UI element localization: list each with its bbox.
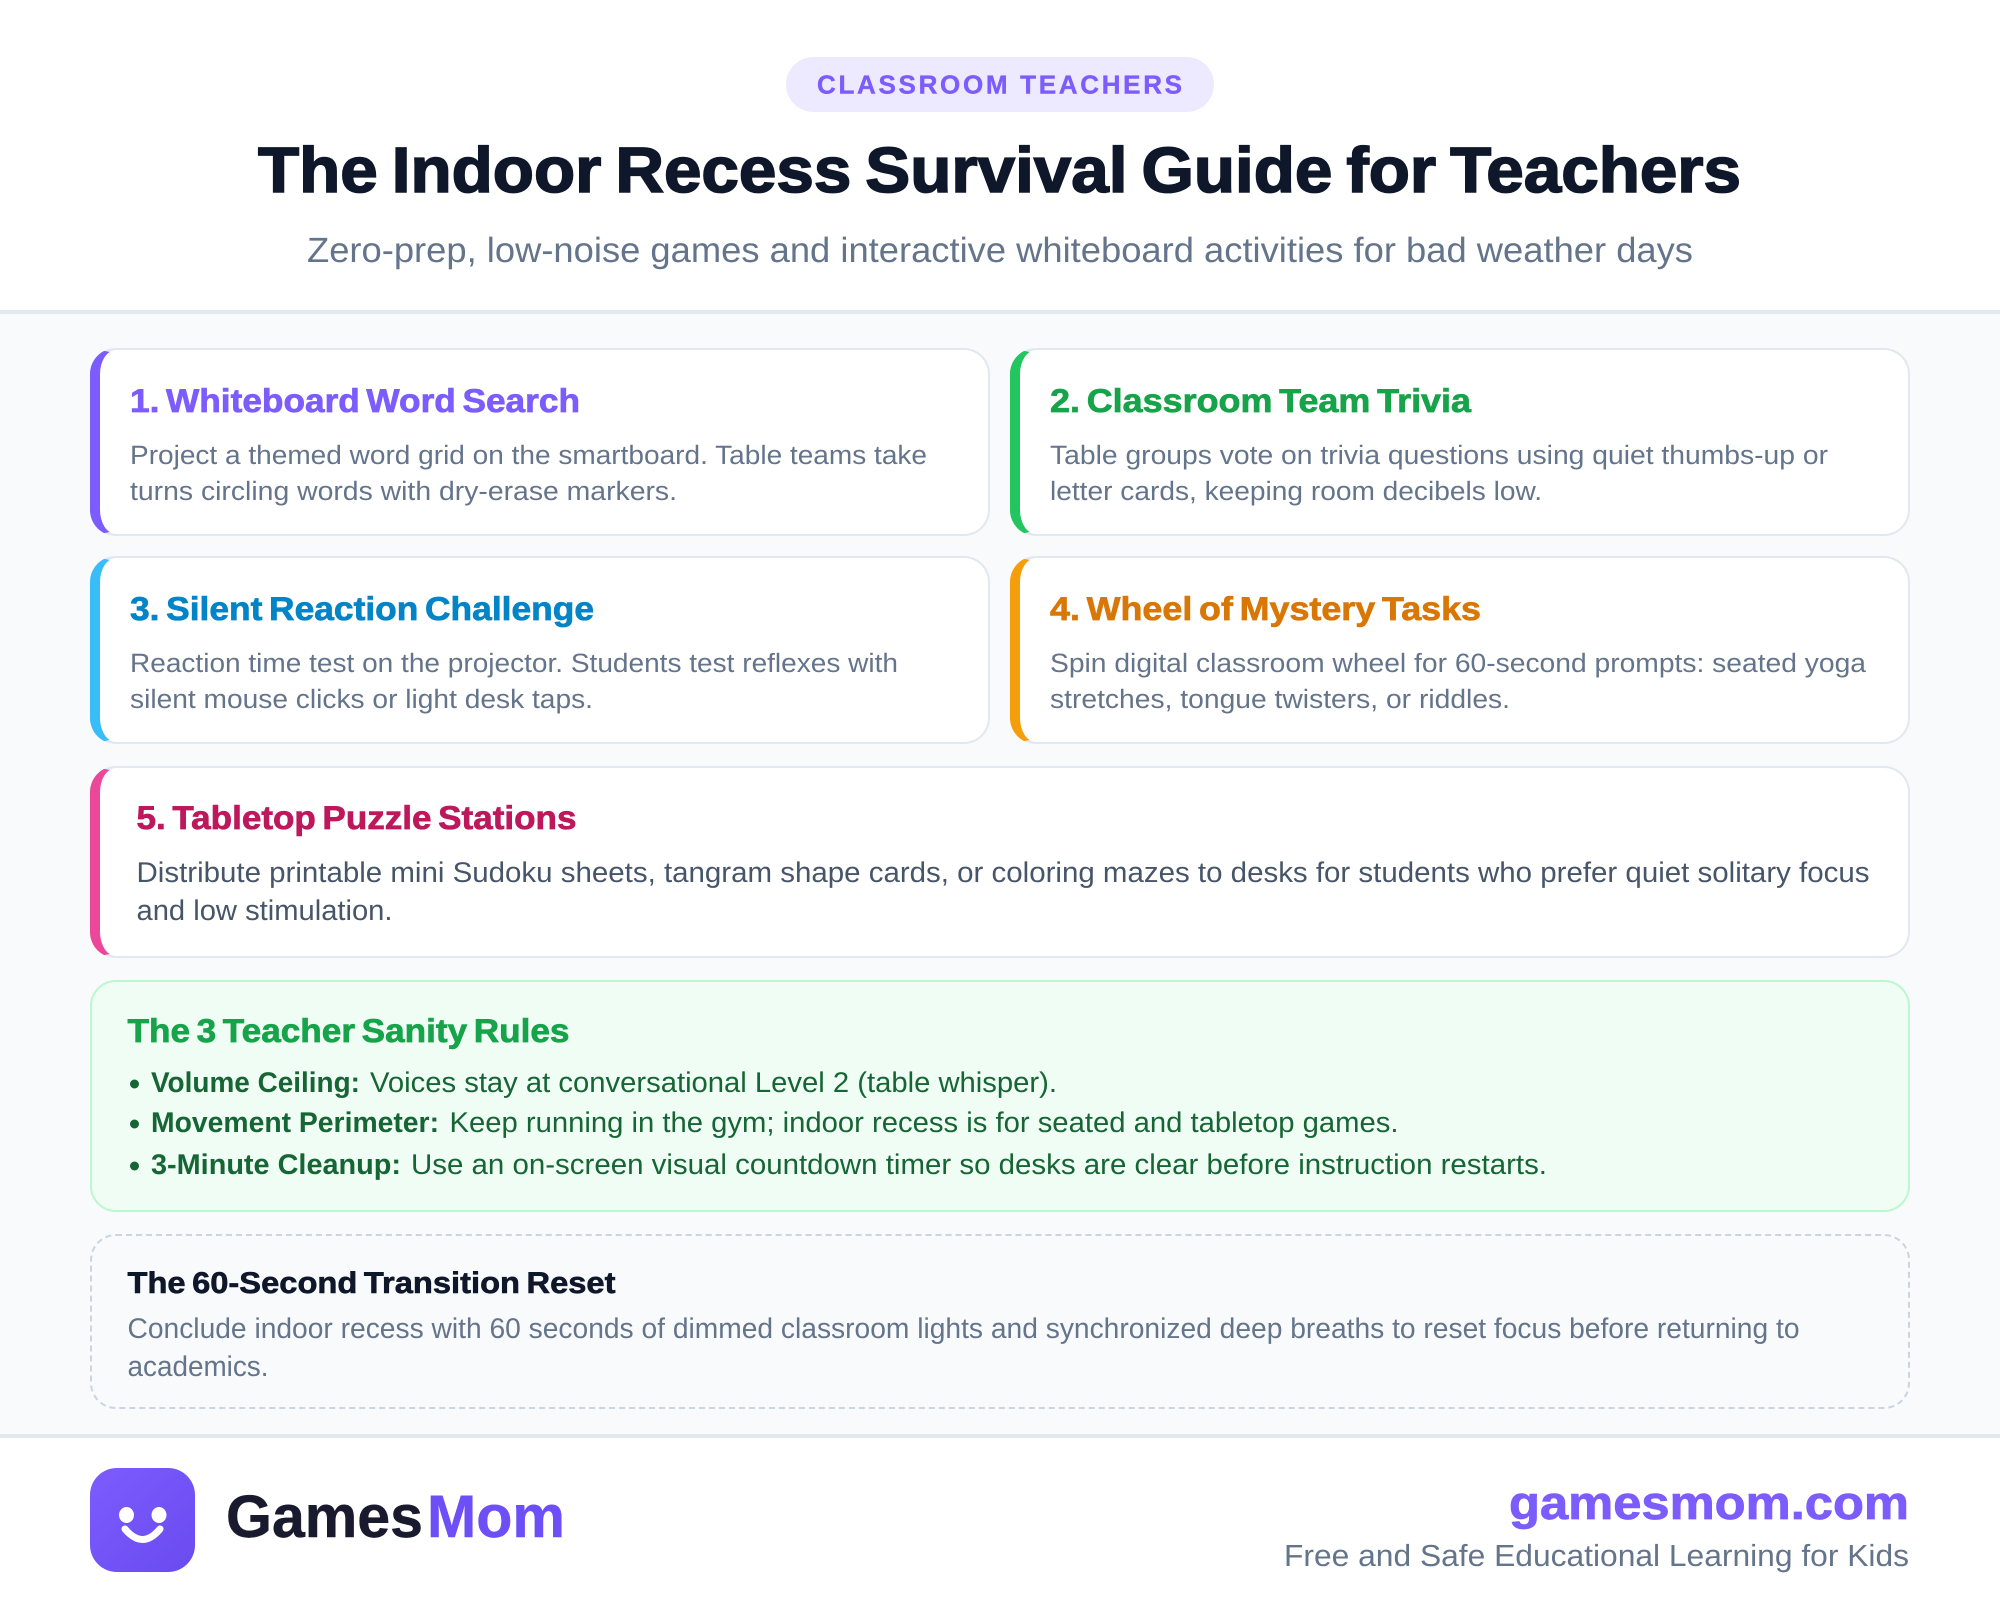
header <box>0 0 2000 314</box>
brand wordmark: Games <box>226 1483 423 1550</box>
card 1 body: Project a themed word grid on the smartboard. Table teams take <box>130 440 927 470</box>
card 2 body: Table groups vote on trivia questions using quiet thumbs-up or <box>1050 440 1828 470</box>
rule: 3-minute cleanup: 3-Minute Cleanup: <box>151 1149 401 1181</box>
rules heading: The 3 Teacher Sanity Rules <box>128 1012 570 1049</box>
icon: GamesMom smiley logo <box>90 1468 195 1572</box>
reset heading: The 60-Second Transition Reset <box>128 1267 616 1300</box>
card 4 body: stretches, tongue twisters, or riddles. <box>1050 684 1510 714</box>
footer <box>0 1434 2000 1604</box>
subtitle: Zero-prep, low-noise games and interactive whiteboard activities for bad weather days <box>307 231 1693 270</box>
panel: transition reset <box>90 1234 1910 1409</box>
card 3 body: Reaction time test on the projector. Students test reflexes with <box>130 648 898 678</box>
card 1: whiteboard word search <box>90 348 990 536</box>
card 2 heading: 2. Classroom Team Trivia <box>1050 382 1472 419</box>
card 4: wheel of mystery tasks <box>1010 556 1910 744</box>
card 5 body: and low stimulation. <box>136 895 392 927</box>
reset body: Conclude indoor recess with 60 seconds of dimmed classroom lights and synchronized deep breaths to reset focus before returning to <box>128 1313 1800 1345</box>
card 5 heading: 5. Tabletop Puzzle Stations <box>136 799 576 836</box>
rule: volume ceiling: Volume Ceiling: <box>151 1067 360 1099</box>
card 1 body: turns circling words with dry-erase markers. <box>130 476 677 506</box>
brand wordmark <box>226 1483 565 1550</box>
reset body <box>128 1313 1800 1383</box>
rule: movement perimeter: Movement Perimeter: <box>151 1107 439 1139</box>
rule: 3-minute cleanup: Use an on-screen visual countdown timer so desks are clear before instruction restarts. <box>411 1149 1547 1181</box>
category pill: CLASSROOM TEACHERS <box>817 70 1182 100</box>
card 3 heading: 3. Silent Reaction Challenge <box>130 590 594 627</box>
card 4 heading: 4. Wheel of Mystery Tasks <box>1050 590 1481 627</box>
card 3: silent reaction challenge <box>90 556 990 744</box>
card 5 body <box>136 857 1870 927</box>
card 5 body: Distribute printable mini Sudoku sheets, tangram shape cards, or coloring mazes to desks for students who prefer quiet solitary focus <box>136 857 1870 889</box>
card 1 heading: 1. Whiteboard Word Search <box>130 382 580 419</box>
card 4 body <box>1050 648 1866 714</box>
card 2: classroom team trivia <box>1010 348 1910 536</box>
card 2 body <box>1050 440 1828 506</box>
panel: teacher sanity rules <box>90 980 1910 1212</box>
card 3 body: silent mouse clicks or light desk taps. <box>130 684 593 714</box>
website url: gamesmom.com <box>1509 1476 1909 1529</box>
reset body: academics. <box>128 1351 268 1383</box>
card 2 body: letter cards, keeping room decibels low. <box>1050 476 1542 506</box>
brand wordmark: Mom <box>427 1483 565 1550</box>
category pill <box>786 57 1214 112</box>
tagline: Free and Safe Educational Learning for Kids <box>1284 1539 1909 1573</box>
card 3 body <box>130 648 898 714</box>
card 4 body: Spin digital classroom wheel for 60-second prompts: seated yoga <box>1050 648 1866 678</box>
rule: movement perimeter: Keep running in the gym; indoor recess is for seated and tabletop games. <box>450 1107 1398 1139</box>
card 1 body <box>130 440 927 506</box>
rule: volume ceiling: Voices stay at conversational Level 2 (table whisper). <box>370 1067 1057 1099</box>
title: The Indoor Recess Survival Guide for Teachers <box>258 134 1741 206</box>
card 5: tabletop puzzle stations <box>90 766 1910 958</box>
